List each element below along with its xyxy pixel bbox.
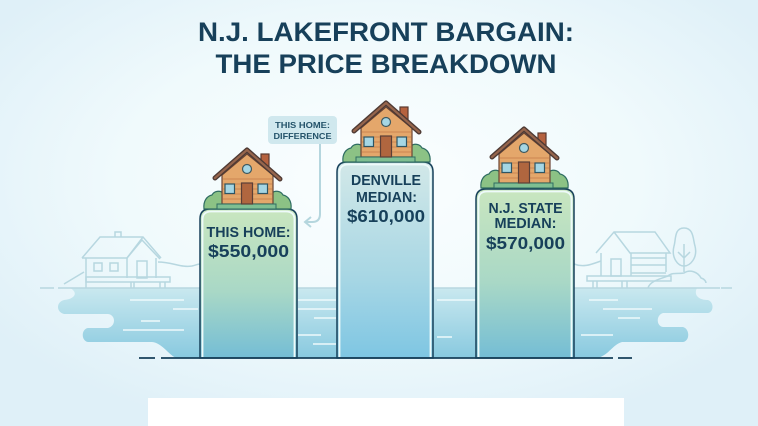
icon: house on this home bar [204,150,291,209]
bar: N.J. state median [476,189,574,358]
bar: this home [200,209,297,358]
label: N.J. state median price: N.J. STATE [488,201,563,217]
label: Denville median price: DENVILLE [351,173,421,189]
label: Denville median price [347,173,425,226]
icon: house on state bar [481,129,568,188]
shoreline [40,287,732,289]
label: Denville median price: MEDIAN: [356,190,417,206]
callout: this home difference: DIFFERENCE [274,131,332,141]
label: N.J. state median price: MEDIAN: [494,216,556,232]
icon: house on Denville bar [343,103,430,162]
label: Denville median price: $610,000 [347,206,425,226]
title: N.J. LAKEFRONT BARGAIN: [198,17,574,47]
label: this home price [206,225,290,261]
lake water [58,288,712,358]
label: this home price: $550,000 [208,241,289,261]
background house: right [574,228,706,288]
label: N.J. state median price [486,201,565,253]
callout: this home difference [268,116,337,144]
white footer panel [148,398,624,426]
arrow: callout to this home bar [305,144,320,227]
title: THE PRICE BREAKDOWN [216,49,556,79]
bar: Denville median [337,162,433,358]
callout: this home difference: THIS HOME: [275,120,330,130]
background house: left [64,232,200,288]
title [198,17,574,79]
label: this home price: THIS HOME: [206,225,290,241]
label: N.J. state median price: $570,000 [486,233,565,253]
baseline [139,357,632,359]
water ripples [123,300,652,344]
